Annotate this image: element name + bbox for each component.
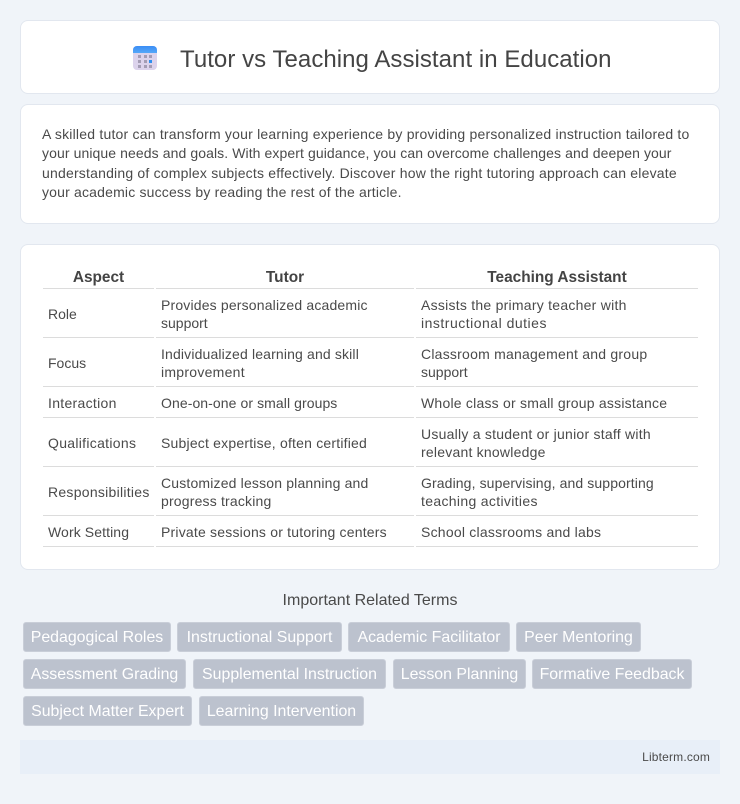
related terms heading: Important Related Terms [283, 592, 457, 609]
row: Responsibilities: Grading, supervising, and supporting [421, 475, 654, 491]
row: Focus: Focus [48, 355, 86, 371]
comparison table panel [20, 244, 720, 570]
row: Work Setting [48, 524, 601, 540]
table header [73, 269, 627, 286]
related terms tags: Assessment Grading [31, 666, 178, 683]
row: Work Setting: School classrooms and labs [421, 524, 601, 540]
icon: calendar [133, 46, 157, 70]
footer bar [20, 740, 720, 774]
row: Interaction: One-on-one or small groups [161, 395, 337, 411]
intro paragraph [42, 126, 690, 200]
related terms tags: Peer Mentoring [524, 629, 633, 646]
header panel [20, 20, 720, 94]
intro paragraph: A skilled tutor can transform your learning experience by providing personalized instruction tailored to [42, 126, 690, 142]
row: Role: Provides personalized academic [161, 297, 368, 313]
row: Work Setting: Work Setting [48, 524, 129, 540]
title: Tutor vs Teaching Assistant in Education [180, 46, 612, 73]
row: Focus: Classroom management and group [421, 346, 647, 362]
related terms tags [23, 622, 692, 726]
related terms tags: Learning Intervention [207, 703, 356, 720]
row: Interaction: Whole class or small group assistance [421, 395, 667, 411]
table header: Aspect [73, 269, 124, 286]
row: Focus: Individualized learning and skill [161, 346, 359, 362]
related terms tags: Supplemental Instruction [202, 666, 377, 683]
related terms tags: Formative Feedback [540, 666, 684, 683]
row: Interaction: Interaction [48, 395, 117, 411]
row: Responsibilities [48, 475, 654, 509]
intro paragraph: your unique needs and goals. With expert guidance, you can overcome challenges and deepen your [42, 145, 672, 161]
intro text panel [20, 104, 720, 224]
related terms tags: Lesson Planning [401, 666, 518, 683]
row: Responsibilities: Responsibilities [48, 484, 150, 500]
row: Role: support [161, 315, 208, 331]
footer credit: Libterm.com [642, 750, 710, 764]
row: Focus: support [421, 364, 468, 380]
row: Qualifications: Subject expertise, often certified [161, 435, 367, 451]
row: Qualifications: Qualifications [48, 435, 136, 451]
row: Responsibilities: progress tracking [161, 493, 271, 509]
related terms tags: Pedagogical Roles [31, 629, 163, 646]
row: Qualifications: Usually a student or junior staff with [421, 426, 651, 442]
table header: Teaching Assistant [487, 269, 627, 286]
row: Role: Role [48, 306, 77, 322]
intro paragraph: understanding of complex subjects effectively. Discover how the right tutoring approach can elevate [42, 165, 677, 181]
row: Qualifications: relevant knowledge [421, 444, 546, 460]
related terms tags: Instructional Support [187, 629, 332, 646]
row: Role: instructional duties [421, 315, 547, 331]
row: Responsibilities: Customized lesson planning and [161, 475, 368, 491]
row: Responsibilities: teaching activities [421, 493, 538, 509]
row: Qualifications [48, 426, 651, 460]
row: Focus: improvement [161, 364, 245, 380]
row: Role: Assists the primary teacher with [421, 297, 627, 313]
row: Work Setting: Private sessions or tutoring centers [161, 524, 387, 540]
intro paragraph: your academic success by reading the rest of the article. [42, 184, 402, 200]
related terms tags: Academic Facilitator [357, 629, 501, 646]
table header: Tutor [266, 269, 304, 286]
row: Role [48, 297, 627, 331]
row: Focus [48, 346, 647, 380]
related terms tags: Subject Matter Expert [31, 703, 184, 720]
row: Interaction [48, 395, 667, 411]
